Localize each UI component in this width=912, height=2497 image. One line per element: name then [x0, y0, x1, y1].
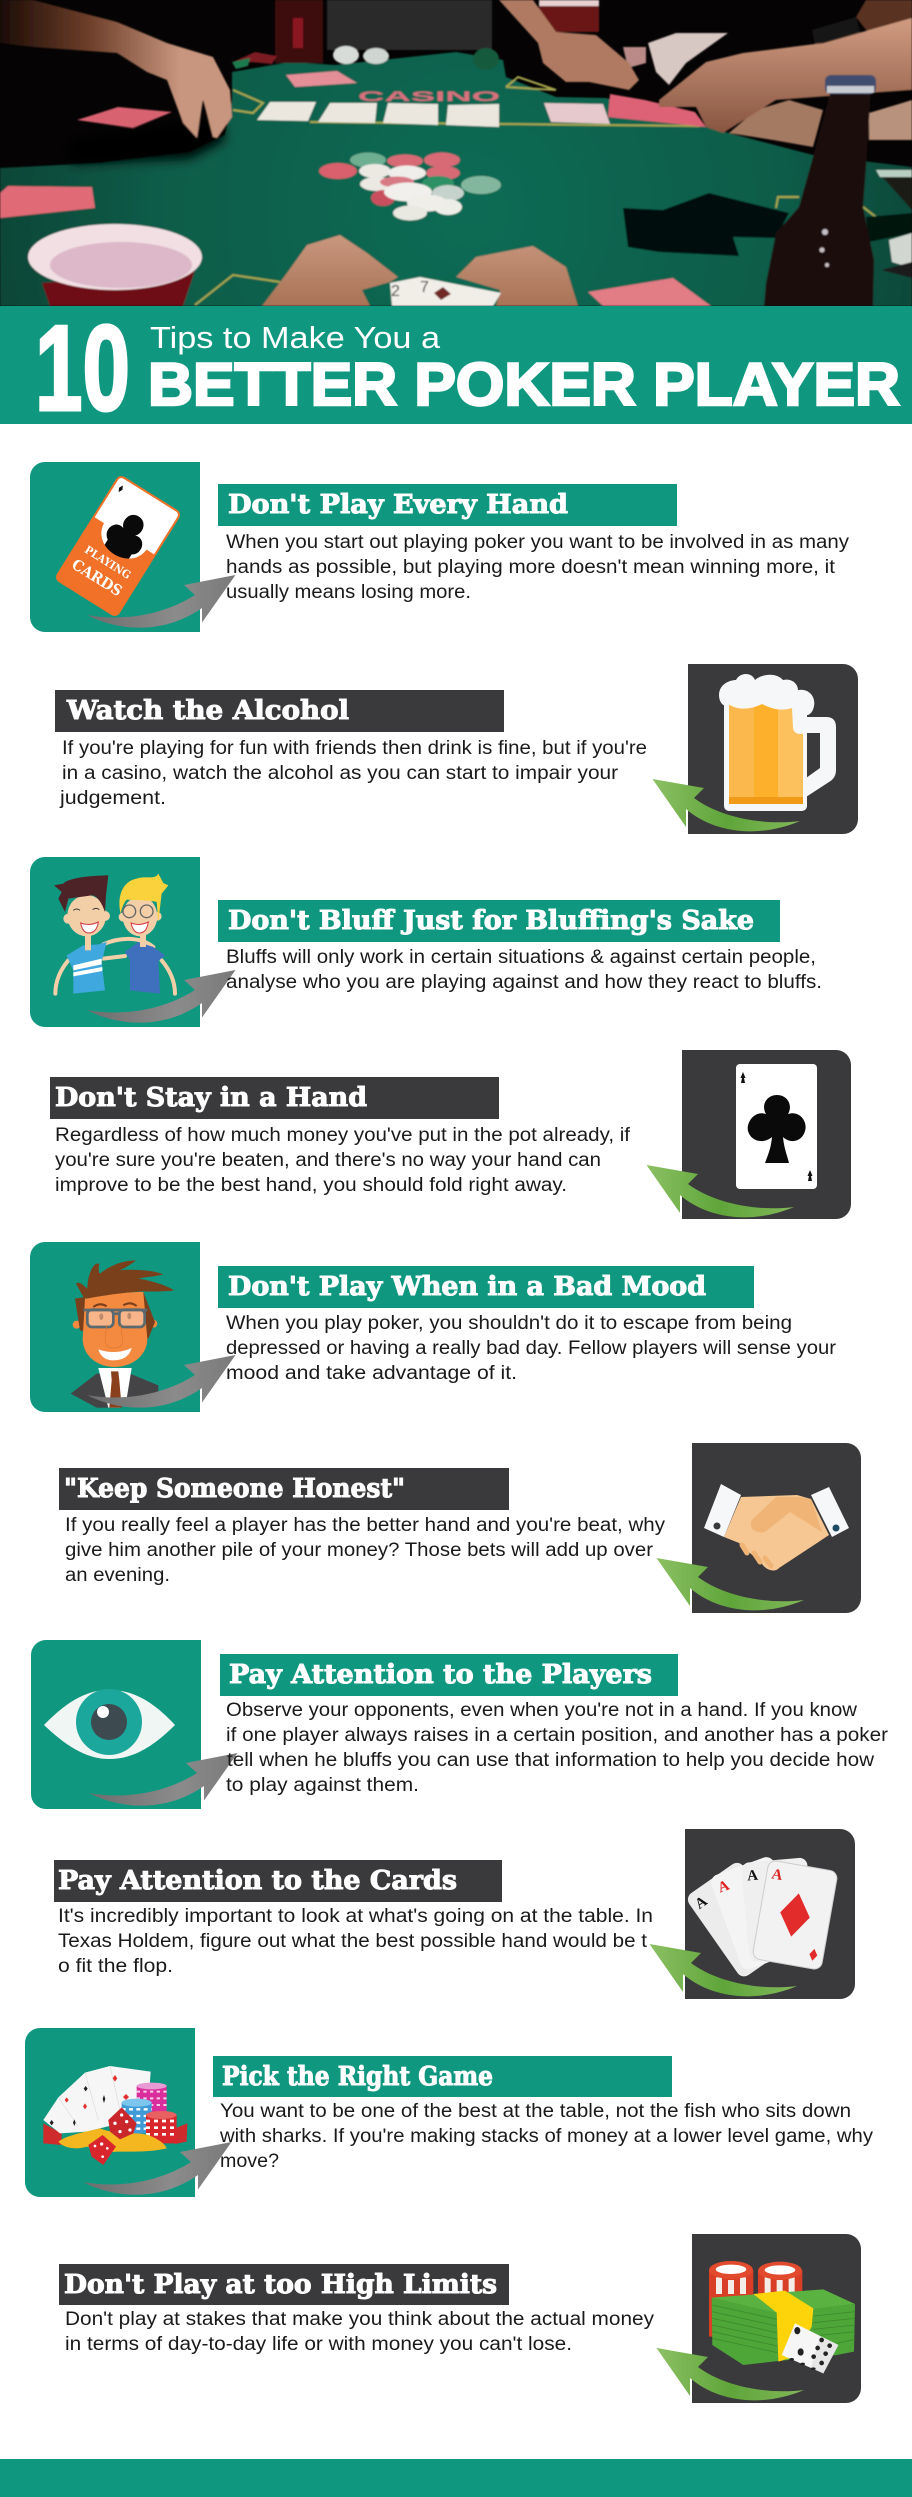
hero photo: poker table: [0, 0, 912, 306]
subtitle: Tips to Make You a: [150, 320, 441, 355]
body text: with sharks. If you're making stacks of money at a lower level game, why: [219, 2126, 874, 2147]
icon panel: four aces: A: [716, 1878, 732, 1896]
body text: move?: [220, 2151, 279, 2172]
arrow: [89, 1753, 238, 1806]
arrow: [83, 2142, 232, 2195]
body text: depressed or having a really bad day. Fellow players will sense your: [226, 1338, 837, 1359]
tip 5: Don't Play When in a Bad Mood: [30, 1242, 837, 1412]
top right hand: [499, 0, 639, 90]
body text: give him another pile of your money? Those bets will add up over: [65, 1540, 654, 1561]
body text: tell when he bluffs you can use that information to help you decide how: [227, 1750, 874, 1771]
body text: [226, 947, 822, 993]
body text: [65, 2309, 655, 2355]
body text: judgement.: [59, 788, 166, 809]
heading bar: [218, 1266, 754, 1308]
heading bar: Don't Play at too High Limits: [64, 2270, 497, 2300]
body text: [58, 1906, 653, 1977]
body text: analyse who you are playing against and how they react to bluffs.: [226, 972, 822, 993]
icon panel: ace of clubs: [682, 1050, 851, 1219]
heading bar: Don't Play When in a Bad Mood: [228, 1272, 706, 1302]
bottom hands: [262, 235, 398, 306]
tip 2: Watch the Alcohol: [55, 664, 858, 834]
arrow: [87, 575, 236, 628]
arrow: [87, 970, 236, 1023]
beer bottle: [764, 75, 876, 306]
icon panel: beer mug: [688, 664, 858, 834]
chip pile: [319, 152, 501, 220]
heading bar: [213, 2056, 672, 2097]
background cups and shirt: [327, 0, 492, 50]
heading bar: Don't Bluff Just for Bluffing's Sake: [228, 906, 754, 936]
heading bar: [218, 484, 677, 526]
arrow: [656, 1558, 804, 1610]
black card shadows: [623, 193, 789, 256]
icon panel: four aces: A: [692, 1893, 711, 1913]
body text: [226, 532, 850, 603]
casino text: CASINO: [358, 88, 500, 104]
heading bar: [50, 1077, 499, 1119]
body text: If you're playing for fun with friends then drink is fine, but if you're: [62, 738, 647, 759]
tip 7: Pay Attention to the Players: [31, 1640, 889, 1809]
tip 1: Don't Play Every Hand: [30, 462, 850, 632]
tip 8: Pay Attention to the Cards: [54, 1829, 855, 1999]
icon panel: two friends: [30, 857, 200, 1027]
body text: usually means losing more.: [226, 582, 471, 603]
tip 3: Don't Bluff Just for Bluffing's Sake: [30, 857, 822, 1027]
tip 10: Don't Play at too High Limits: [59, 2234, 861, 2403]
heading bar: [59, 1468, 509, 1510]
body text: It's incredibly important to look at what's going on at the table. In: [58, 1906, 653, 1927]
lower right hand and arm: [729, 100, 823, 147]
icon panel: four aces: A: [770, 1866, 784, 1884]
icon panel: eye: [31, 1640, 201, 1809]
pink drink cup: [28, 224, 202, 306]
body text: Texas Holdem, figure out what the best possible hand would be t: [58, 1931, 648, 1952]
heading bar: Don't Stay in a Hand: [55, 1083, 367, 1113]
body text: [65, 1515, 666, 1586]
body text: [55, 1125, 631, 1196]
held cards: 7: [420, 279, 429, 296]
table markings: [195, 77, 876, 305]
body text: hands as possible, but playing more doesn't mean winning more, it: [226, 557, 836, 578]
icon panel: smiling man: [30, 1242, 200, 1412]
held cards: 2: [391, 283, 400, 300]
arrow: [656, 2348, 804, 2400]
left arm and hand: [0, 0, 232, 138]
body text: You want to be one of the best at the table, not the fish who sits down: [220, 2101, 851, 2122]
table felt: [0, 52, 912, 306]
icon panel: playing cards: PLAYING: [82, 543, 133, 582]
heading bar: Pay Attention to the Cards: [58, 1866, 457, 1896]
footer band: [0, 2459, 912, 2497]
body text: mood and take advantage of it.: [226, 1363, 517, 1384]
pink cards: [77, 107, 172, 128]
held cards: [390, 277, 501, 306]
title banner: [0, 300, 912, 436]
heading bar: Watch the Alcohol: [66, 696, 349, 726]
heading bar: [218, 900, 780, 942]
table cards: [257, 102, 499, 127]
arrow: [87, 1355, 236, 1408]
tip 9: Pick the Right Game: [25, 2028, 874, 2197]
heading bar: [54, 1860, 502, 1902]
body text: to play against them.: [226, 1775, 419, 1796]
body text: Observe your opponents, even when you're not in a hand. If you know: [226, 1700, 857, 1721]
icon panel: cards, chips and dice: [25, 2028, 195, 2197]
heading bar: Don't Play Every Hand: [228, 490, 568, 520]
body text: When you play poker, you shouldn't do it to escape from being: [226, 1313, 792, 1334]
heading bar: Pick the Right Game: [222, 2062, 493, 2092]
body text: o fit the flop.: [58, 1956, 173, 1977]
arrow: [646, 1165, 794, 1217]
tip 4: Don't Stay in a Hand: [50, 1050, 851, 1219]
icon panel: playing cards: CARDS: [69, 555, 126, 600]
icon panel: four aces: [685, 1829, 855, 1999]
body text: Bluffs will only work in certain situations & against certain people,: [226, 947, 816, 968]
body text: you're sure you're beaten, and there's no way your hand can: [55, 1150, 601, 1171]
body text: When you start out playing poker you want to be involved in as many: [226, 532, 850, 553]
body text: in terms of day-to-day life or with money you can't lose.: [65, 2334, 572, 2355]
heading bar: Pay Attention to the Players: [229, 1660, 652, 1690]
icon panel: money, chips and dice: [692, 2234, 861, 2403]
heading bar: "Keep Someone Honest": [64, 1474, 405, 1504]
icon panel: playing cards: [30, 462, 200, 632]
icon panel: handshake: [692, 1443, 861, 1613]
arrow: [652, 779, 800, 831]
heading bar: [220, 1654, 678, 1696]
body text: if one player always raises in a certain position, and another has a poker: [226, 1725, 889, 1746]
body text: Don't play at stakes that make you think about the actual money: [65, 2309, 655, 2330]
heading bar: [55, 690, 504, 732]
tip 6: Keep Someone Honest: [59, 1443, 861, 1613]
body text: an evening.: [65, 1565, 170, 1586]
right arm and hand: [659, 18, 912, 133]
big number 10: 10: [35, 300, 130, 436]
body text: in a casino, watch the alcohol as you can start to impair your: [62, 763, 619, 784]
body text: [219, 2101, 874, 2172]
icon panel: four aces: A: [746, 1868, 759, 1884]
arrow: [650, 1944, 797, 1996]
body text: Regardless of how much money you've put in the pot already, if: [55, 1125, 631, 1146]
body text: [59, 738, 647, 809]
heading bar: [59, 2264, 509, 2305]
body text: [226, 1700, 889, 1796]
main title: BETTER POKER PLAYER: [148, 351, 900, 418]
body text: improve to be the best hand, you should fold right away.: [55, 1175, 567, 1196]
body text: If you really feel a player has the better hand and you're beat, why: [65, 1515, 666, 1536]
body text: [226, 1313, 837, 1384]
